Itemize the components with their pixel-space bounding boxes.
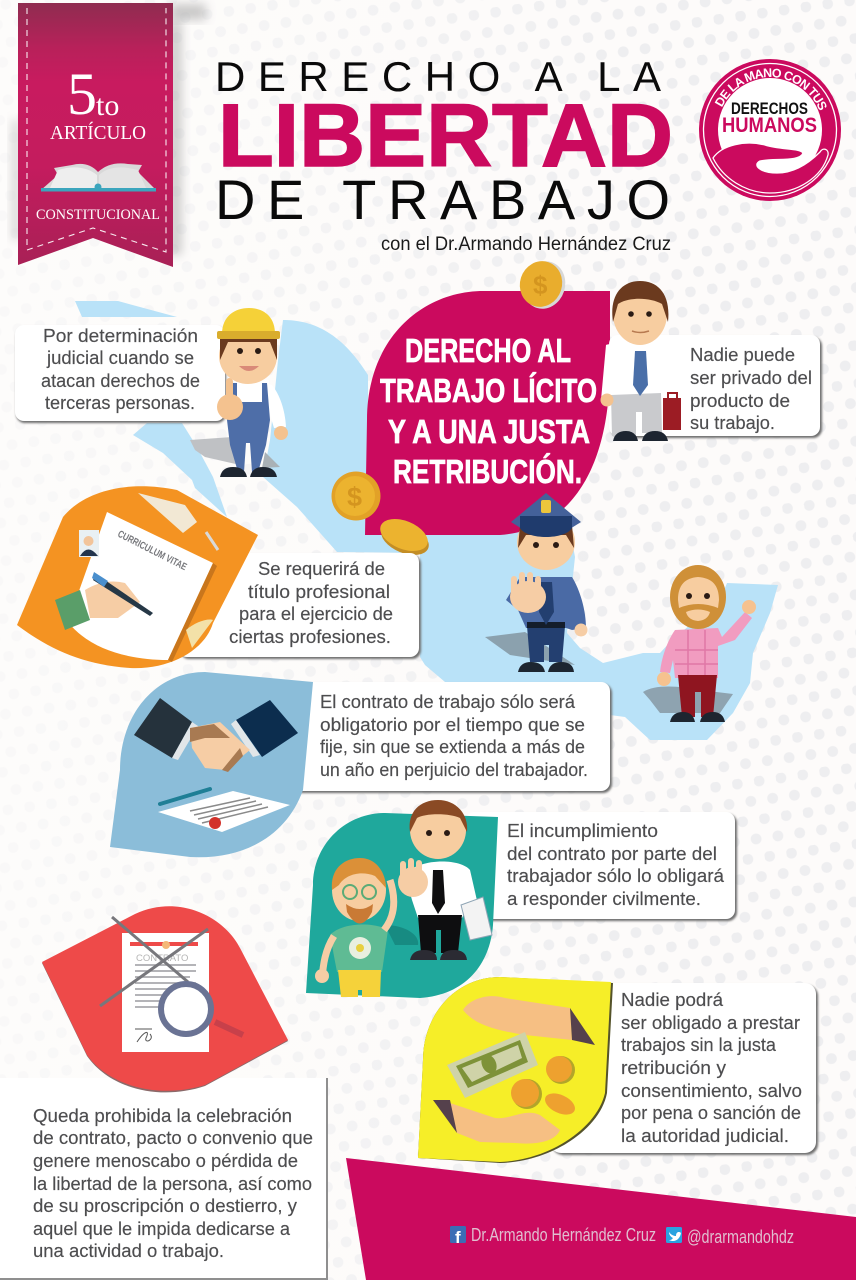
title line 2: LIBERTAD: [218, 85, 673, 185]
callout text: trabajos sin la justa: [621, 1035, 777, 1055]
callout text: obligatorio por el tiempo que se: [320, 715, 585, 735]
headline text: TRABAJO LÍCITO: [380, 372, 597, 409]
icon: coin flat: [376, 513, 433, 561]
icon: facebook: f: [455, 1228, 461, 1247]
callout: por determinación judicial: [15, 325, 226, 423]
character: man with glasses: [315, 858, 394, 997]
callout text: Nadie puede: [690, 345, 795, 365]
callout: nadie puede ser privado: [609, 335, 822, 438]
callout text: [507, 821, 725, 909]
ribbon word: artículo: ARTÍCULO: [50, 121, 146, 144]
callout text: [229, 559, 393, 647]
callout text: retribución y: [621, 1058, 726, 1078]
logo word: derechos: DERECHOS: [731, 99, 808, 118]
twitter handle: @drarmandohdz: [687, 1227, 794, 1247]
title line 1: DERECHO A LA: [215, 53, 661, 100]
callout text: terceras personas.: [45, 393, 195, 413]
logo hand: [713, 143, 828, 193]
cards and clips: [138, 493, 197, 533]
curriculum heading: CURRICULUM VITAE: [116, 529, 189, 573]
callout text: título profesional: [248, 582, 390, 602]
callout text: [33, 1106, 313, 1261]
callout: contrato de trabajo: [280, 682, 612, 793]
headline text: Y A UNA JUSTA: [388, 413, 590, 450]
character: man with briefcase: [600, 281, 681, 441]
paper: [122, 933, 209, 1052]
icon: hand with pen: [55, 572, 153, 630]
ribbon number: 5: [67, 61, 97, 127]
callout text: para el ejercicio de: [239, 604, 393, 624]
logo: derechos humanos: [699, 59, 841, 201]
callout: queda prohibida: [0, 1078, 328, 1280]
icon: open book: [41, 163, 156, 192]
callout text: trabajador sólo lo obligará: [507, 866, 725, 886]
callout text: judicial cuando se: [46, 348, 194, 368]
icon: coin top: $: [533, 270, 548, 300]
callout text: ser privado del: [690, 368, 812, 388]
callout text: de contrato, pacto o convenio que: [33, 1128, 313, 1148]
ribbon ordinal: to: [96, 89, 119, 122]
callout text: a responder civilmente.: [507, 889, 701, 909]
ribbon: 5to artículo constitucional: [12, 3, 206, 267]
icon: contract and pen: [158, 789, 290, 832]
logo ring text: DE LA MANO CON TUS: [714, 68, 826, 110]
title line 3: DE TRABAJO: [215, 168, 670, 231]
icon: magnifying glass: [161, 984, 243, 1035]
callout text: un año en perjuicio del trabajador.: [320, 760, 588, 780]
subtitle: con el Dr.Armando Hernández Cruz: [381, 234, 671, 255]
callout text: de su proscripción o destierro, y: [33, 1196, 297, 1216]
ribbon word: constitucional: CONSTITUCIONAL: [36, 207, 160, 223]
character: construction worker: [190, 308, 288, 477]
callout text: genere menoscabo o pérdida de: [33, 1151, 298, 1171]
callout: incumplimiento del contrato: [465, 812, 737, 921]
callout text: [621, 990, 802, 1146]
logo word: humanos: HUMANOS: [722, 114, 817, 137]
callout text: [320, 692, 588, 780]
character: police officer: [485, 493, 588, 672]
callout text: Nadie podrá: [621, 990, 724, 1010]
callout text: la libertad de la persona, así como: [33, 1174, 312, 1194]
callout text: [690, 345, 812, 433]
character: man in tie: [398, 800, 492, 960]
callout text: Por determinación: [43, 326, 198, 346]
photo: [79, 530, 99, 557]
headline text: DERECHO AL: [405, 332, 571, 369]
footer band: [346, 1158, 856, 1280]
panel: money in hands: [418, 977, 613, 1163]
callout text: El contrato de trabajo sólo será: [320, 692, 576, 712]
callout text: la autoridad judicial.: [621, 1126, 789, 1146]
callout text: El incumplimiento: [507, 821, 658, 841]
callout text: ser obligado a prestar: [621, 1013, 800, 1033]
callout text: su trabajo.: [690, 413, 775, 433]
headline text: RETRIBUCIÓN.: [393, 453, 582, 490]
icon: handshake: [134, 698, 298, 772]
panel: two men: [306, 800, 498, 998]
icon: coin left: [332, 472, 380, 520]
callout: se requerirá de título: [178, 553, 421, 659]
callout: nadie podrá ser obligado: [550, 983, 818, 1155]
icon: twitter: [666, 1227, 682, 1243]
callout text: consentimiento, salvo: [621, 1081, 802, 1101]
title: [215, 53, 673, 255]
callout text: fije, sin que se extienda a más de: [320, 737, 585, 757]
cross marks: [100, 917, 208, 1006]
callout text: atacan derechos de: [41, 371, 200, 391]
icon: coin top: [514, 256, 571, 314]
headline text: [380, 332, 597, 490]
callout text: Queda prohibida la celebración: [33, 1106, 292, 1126]
callout text: Se requerirá de: [258, 559, 385, 579]
panel: handshake and contract: [110, 672, 313, 857]
character: bearded man: [643, 565, 756, 722]
icon: lower hand: [433, 1100, 560, 1144]
icon: facebook: [450, 1226, 466, 1247]
callout text: [41, 326, 200, 413]
paper: CONTRATO: [136, 953, 188, 964]
panel: curriculum vitae: [17, 486, 258, 668]
callout text: por pena o sanción de: [621, 1103, 801, 1123]
facebook name: Dr.Armando Hernández Cruz: [471, 1225, 656, 1245]
icon: upper hand: [463, 996, 595, 1045]
callout text: aquel que le impida dedicarse a: [33, 1219, 291, 1239]
callout text: producto de: [690, 391, 790, 411]
icon: coin left: $: [347, 482, 362, 512]
callout text: una actividad o trabajo.: [33, 1241, 224, 1261]
icon: banknote: [447, 1032, 538, 1098]
panel: crossed-out contract: [42, 906, 288, 1092]
icon: coins: [511, 1056, 578, 1119]
callout text: del contrato por parte del: [507, 844, 717, 864]
map of Mexico: [75, 301, 778, 740]
panel: main headline: [365, 291, 610, 535]
callout text: ciertas profesiones.: [229, 627, 391, 647]
